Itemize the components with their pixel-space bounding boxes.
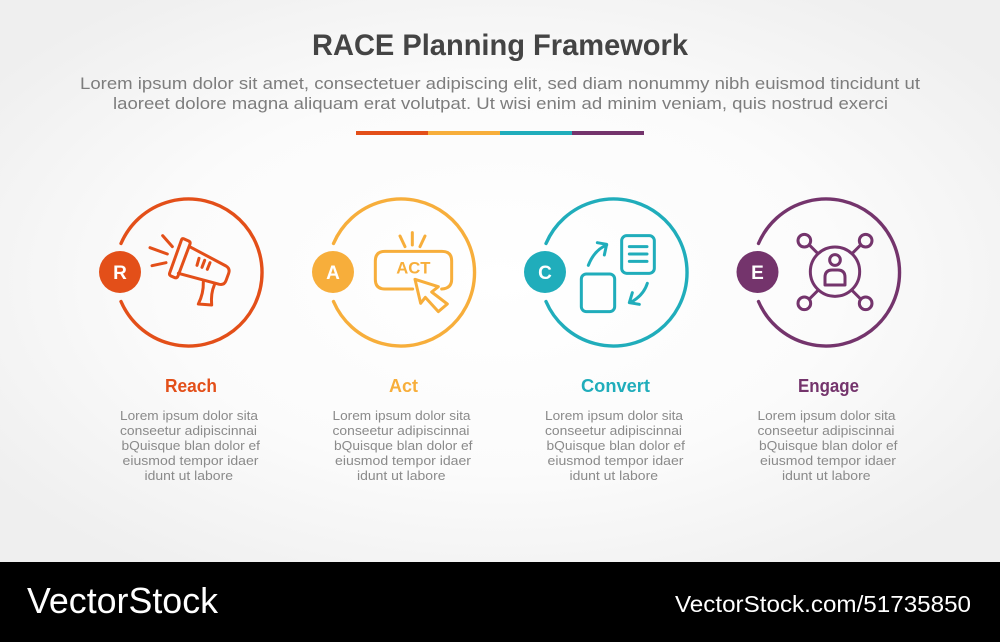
ring: Engage — [758, 199, 900, 346]
colour divider bar — [356, 131, 644, 135]
icon: connected person network — [798, 234, 872, 310]
text: Act body: eiusmod tempor idaer — [335, 453, 472, 468]
ring: Convert — [546, 199, 687, 346]
text: Convert body: eiusmod tempor idaer — [548, 453, 684, 468]
text: Engage body — [758, 408, 898, 483]
icon: megaphone — [150, 236, 229, 305]
watermark footer bar: VectorStock — [27, 580, 219, 621]
badge: E — [736, 251, 778, 293]
text: Act body: Lorem ipsum dolor sita — [332, 408, 471, 423]
badge: R: R — [113, 263, 127, 284]
text: Engage body: conseetur adipiscinnai — [758, 423, 895, 438]
text: Convert body: bQuisque blan dolor ef — [546, 438, 685, 453]
ring: Reach — [121, 199, 262, 346]
panel: Engage — [736, 199, 900, 483]
badge: R — [99, 251, 141, 293]
icon: ACT button with cursor: ACT — [396, 258, 430, 277]
heading: Act: Act — [389, 376, 418, 396]
icon: ACT button with cursor — [375, 233, 452, 312]
text: Engage body: bQuisque blan dolor ef — [759, 438, 898, 453]
text: Convert body: idunt ut labore — [570, 468, 658, 483]
heading: Engage: Engage — [798, 376, 859, 396]
text: Reach body: eiusmod tempor idaer — [122, 453, 259, 468]
text: Reach body: conseetur adipiscinnai — [120, 423, 257, 438]
text: Act body: bQuisque blan dolor ef — [334, 438, 473, 453]
badge: A — [312, 251, 354, 293]
badge: A: A — [326, 263, 340, 284]
text: Act body: idunt ut labore — [357, 468, 446, 483]
text: Convert body: Lorem ipsum dolor sita — [545, 408, 684, 423]
title: RACE Planning Framework — [312, 29, 688, 62]
heading: Convert: Convert — [581, 376, 650, 396]
badge: C — [524, 251, 566, 293]
watermark footer bar — [0, 562, 1000, 642]
badge: E: E — [751, 263, 764, 284]
text: Engage body: eiusmod tempor idaer — [760, 453, 897, 468]
watermark footer bar: VectorStock.com/51735850 — [675, 591, 971, 617]
panel: Act — [312, 199, 475, 483]
text: Act body: conseetur adipiscinnai — [332, 423, 470, 438]
text: Engage body: idunt ut labore — [782, 468, 870, 483]
text: Convert body — [545, 408, 685, 483]
text: Reach body: Lorem ipsum dolor sita — [120, 408, 259, 423]
panel: Convert — [524, 199, 687, 483]
badge: C: C — [538, 263, 552, 284]
panel: Reach — [99, 199, 262, 483]
heading: Reach: Reach — [165, 376, 217, 396]
subtitle text — [80, 74, 920, 113]
text: Reach body: bQuisque blan dolor ef — [122, 438, 260, 453]
subtitle text: laoreet dolore magna aliquam erat volutpat. Ut wisi enim ad minim veniam, quis nostrud exerci — [113, 94, 888, 113]
text: Act body — [332, 408, 473, 483]
text: Reach body — [120, 408, 260, 483]
subtitle text: Lorem ipsum dolor sit amet, consectetuer adipiscing elit, sed diam nonummy nibh euismod tincidunt ut — [80, 74, 920, 93]
text: Convert body: conseetur adipiscinnai — [545, 423, 682, 438]
text: Reach body: idunt ut labore — [144, 468, 233, 483]
text: Engage body: Lorem ipsum dolor sita — [758, 408, 896, 423]
icon: conversion arrows and documents — [581, 236, 654, 312]
ring: Act — [334, 199, 475, 346]
